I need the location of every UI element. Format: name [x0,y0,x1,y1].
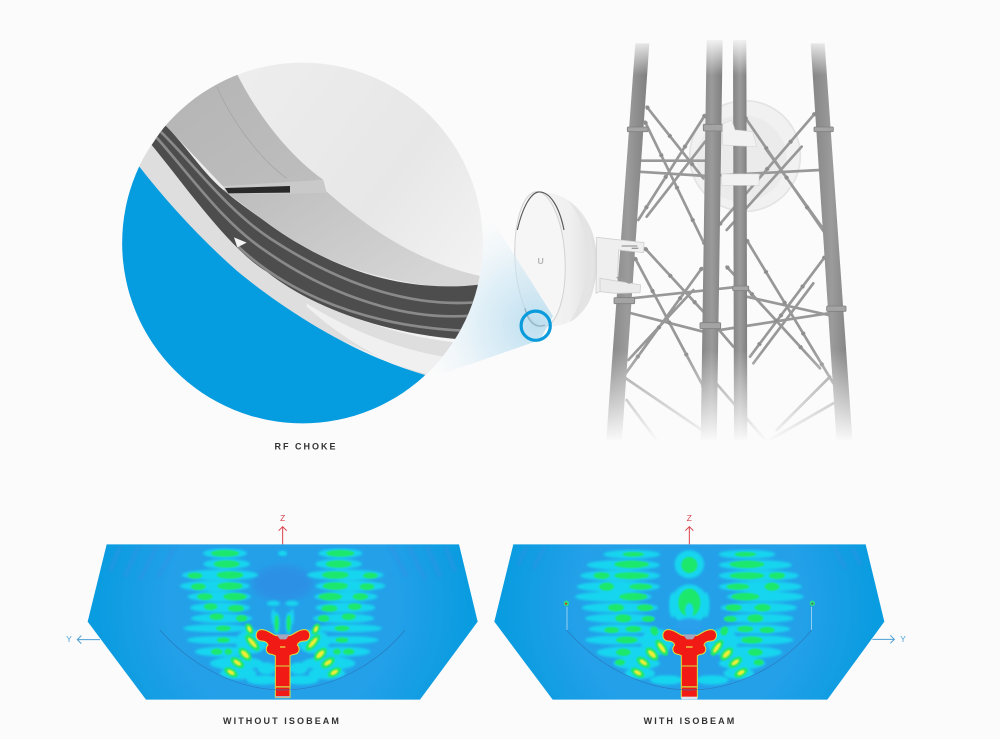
axis y label: Y [900,634,906,644]
white band [138,145,463,377]
lower white ledge [307,303,443,374]
axis z label: Z [280,513,285,523]
lattice cross braces [623,107,833,442]
panel: tower with dishes [511,37,860,447]
feed horn [663,630,716,699]
axis y [872,635,894,643]
dark choke ribs [152,125,482,339]
isobeam left marker [564,601,569,630]
reflector arc [160,630,405,690]
icon: front dish [511,190,644,328]
reflector arc [567,630,812,690]
callout ring [521,311,550,340]
heatmap shape [494,544,884,700]
heatmap shape [88,544,478,700]
infographic canvas [66,40,906,724]
rib notch [234,237,247,247]
feed horn [256,630,310,698]
flap seam [217,87,287,178]
darker central field [253,565,313,602]
heat lobes [575,550,804,685]
rear dish brackets [722,120,759,185]
leg clamps [614,124,846,329]
tower fade top [593,37,860,75]
flap slit [225,186,290,193]
axis y [77,636,100,644]
icon: rear dish [690,101,800,211]
magnifier beam [425,212,553,380]
lower metal surface [223,190,483,288]
heat lobes [180,549,385,685]
corner streaks [518,547,860,568]
tower fade bottom [593,350,860,447]
chart: without isobeam [66,513,478,700]
heading: RF choke: RF CHOKE [274,442,338,452]
panel: rf choke close-up circle [122,62,482,424]
upper flap [160,70,323,187]
blue region [122,166,425,424]
icon: front dish: U [538,256,544,266]
center lobes [673,549,706,621]
corner streaks [110,547,455,580]
axis z [685,527,693,544]
mount bracket [596,237,644,293]
axis z [279,527,287,544]
chart: with isobeam [494,513,906,700]
heading: without isobeam: WITHOUT ISOBEAM [223,716,341,726]
rib highlights [157,132,477,331]
axis y label: Y [66,634,72,644]
tower legs [606,40,853,443]
axis z label: Z [687,513,692,523]
heading: with isobeam: WITH ISOBEAM [644,716,736,726]
lattice bolts [623,107,833,387]
flap edge [223,180,327,194]
isobeam right marker [810,601,815,630]
